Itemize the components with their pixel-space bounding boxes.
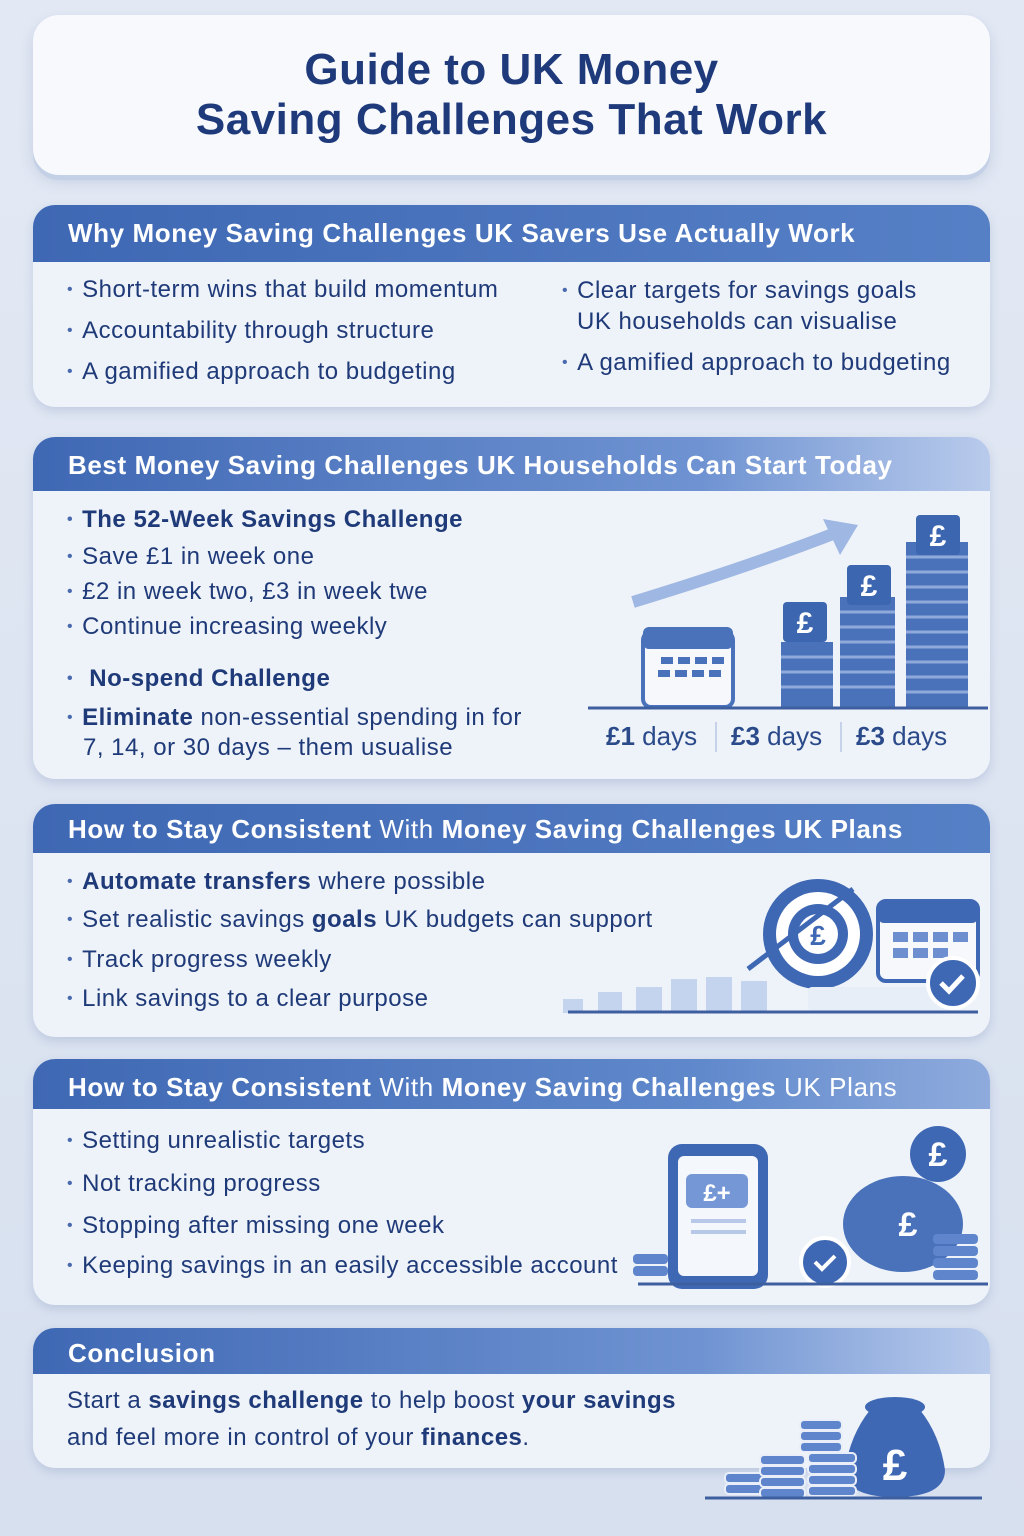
tips list: Track progress weekly [82,946,332,973]
challenge list: No-spend Challenge [89,665,330,692]
conclusion text: Start a savings challenge to help boost your savings [67,1387,676,1414]
challenge list [68,506,522,761]
conclusion text: and feel more in control of your finances. [67,1424,530,1451]
tips list: Link savings to a clear purpose [82,985,428,1012]
header conclusion [33,1328,990,1374]
chart: coin stacks [588,515,988,752]
title card: Saving Challenges That Work [196,95,827,144]
conclusion text [67,1387,676,1451]
header consistent [33,804,990,853]
icon: phone and piggy bank: £ [899,1206,918,1244]
chart: coin stacks: £1 days [606,721,697,751]
icon: phone and piggy bank [633,1126,988,1289]
chart: coin stacks: £ [797,607,814,640]
panel: best challenges [33,437,990,779]
challenge list: Save £1 in week one [82,543,314,570]
challenge list: £2 in week two, £3 in week twe [82,578,428,605]
chart: coin stacks: £3 days [856,721,947,751]
challenge list: The 52-Week Savings Challenge [82,506,463,533]
left bullets [68,276,498,385]
header mistakes: How to Stay Consistent With Money Saving Challenges UK Plans [68,1072,897,1102]
right bullets: A gamified approach to budgeting [577,349,951,376]
header mistakes [33,1059,990,1109]
icon: money bag and coins: £ [883,1441,908,1490]
header best [33,437,990,491]
left bullets: Short-term wins that build momentum [82,276,498,303]
header why [33,205,990,262]
icon: money bag and coins [705,1397,982,1500]
header conclusion: Conclusion [68,1338,216,1368]
header why: Why Money Saving Challenges UK Savers Use Actually Work [68,218,855,248]
chart: coin stacks: £ [930,520,947,553]
icon: target and calendar [563,879,980,1014]
challenge list: 7, 14, or 30 days – them usualise [83,734,453,761]
panel: mistakes [33,1059,990,1305]
right bullets: Clear targets for savings goals [577,277,917,304]
chart: coin stacks: £3 days [731,721,822,751]
panel: why [33,205,990,407]
icon: target and calendar: £ [810,920,826,951]
icon: phone and piggy bank: £+ [703,1180,731,1207]
title card [33,15,990,175]
title card: Guide to UK Money [304,45,719,94]
panel: consistent [33,804,990,1037]
left bullets: Accountability through structure [82,317,434,344]
mistakes list: Keeping savings in an easily accessible account [82,1252,618,1279]
mistakes list: Stopping after missing one week [82,1212,444,1239]
icon: phone and piggy bank: £ [929,1136,948,1174]
chart: coin stacks: £ [861,570,878,603]
tips list: Set realistic savings goals UK budgets can support [82,906,653,933]
mistakes list [68,1127,618,1279]
header consistent: How to Stay Consistent With Money Saving Challenges UK Plans [68,814,903,844]
panel: conclusion [33,1328,990,1468]
right bullets [562,277,951,376]
header best: Best Money Saving Challenges UK Households Can Start Today [68,450,893,480]
mistakes list: Not tracking progress [82,1170,321,1197]
challenge list: Continue increasing weekly [82,613,387,640]
challenge list: Eliminate non-essential spending in for [82,704,522,731]
left bullets: A gamified approach to budgeting [82,358,456,385]
right bullets: UK households can visualise [577,308,897,335]
mistakes list: Setting unrealistic targets [82,1127,365,1154]
tips list: Automate transfers where possible [82,868,485,895]
tips list [68,868,653,1012]
